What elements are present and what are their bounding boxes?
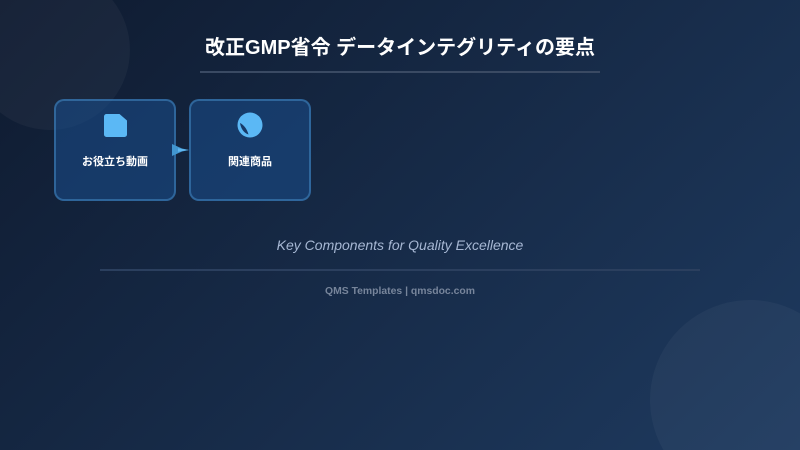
icon: document <box>104 114 127 137</box>
decorative circle: top left <box>0 0 130 130</box>
decorative circle: bottom right <box>650 300 800 450</box>
subtitle: Key Components for Quality Excellence <box>277 237 523 253</box>
panel: related products <box>189 99 311 201</box>
arrow <box>172 144 189 156</box>
icon: globe <box>238 112 262 138</box>
label: helpful videos: お役立ち動画 <box>82 156 148 168</box>
title underline <box>200 71 600 73</box>
label: related products: 関連商品 <box>228 156 272 168</box>
panel: helpful videos <box>54 99 176 201</box>
footer divider <box>100 269 700 271</box>
footer text: QMS Templates | qmsdoc.com <box>325 286 475 297</box>
title: 改正GMP省令 データインテグリティの要点 <box>205 37 595 59</box>
